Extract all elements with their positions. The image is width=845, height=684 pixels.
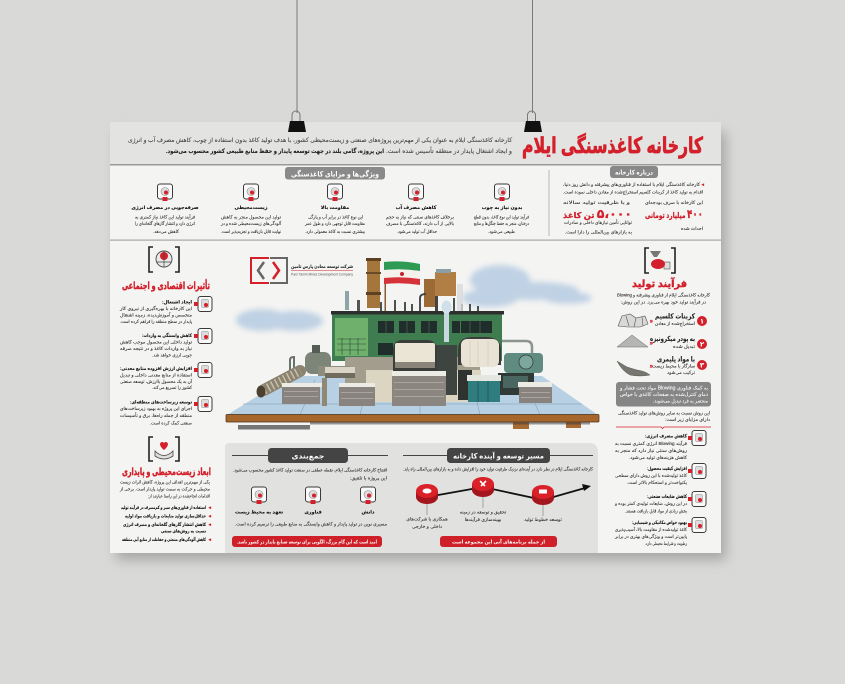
intro paragraph: و ایجاد اشتغال پایدار در منطقه تأسیس شده است. bbox=[386, 146, 512, 155]
machinery base bbox=[345, 345, 481, 402]
stat: capacity: به بازارهای بین‌المللی را دارا است. bbox=[565, 230, 632, 234]
callout: Blowing bbox=[616, 382, 711, 406]
about text: ◂ bbox=[701, 182, 704, 188]
red pill: امید است که این گام بزرگ، الگویی برای توسعه صنایع پایدار در کشور باشد. bbox=[237, 538, 377, 545]
milestone: production lines: توسعه خطوط تولید bbox=[524, 517, 562, 522]
pillar: environment commitment bbox=[235, 487, 283, 516]
feature: energy saving bbox=[131, 184, 199, 234]
feature: no wood bbox=[474, 184, 529, 234]
intro text: در فرآیند تولید خود بهره می‌برد. در این روش: bbox=[621, 300, 706, 304]
heading: features bbox=[285, 167, 385, 180]
feature: environment: نهایت قابل بازیافت و تجزیه‌پذیر است. bbox=[221, 229, 281, 234]
bullet list: ◂ bbox=[208, 537, 211, 543]
right machinery bbox=[498, 341, 543, 395]
item: jobs: ایجاد اشتغال: bbox=[162, 300, 192, 306]
intro paragraph bbox=[128, 135, 512, 155]
step 2: « bbox=[650, 341, 654, 347]
step 1: استخراج‌شده از معادن bbox=[655, 321, 695, 327]
benefit: properties: پایین‌تر است و ویژگی‌های بهتری در برابر bbox=[614, 533, 688, 539]
closing text: مسیری نوین در تولید پایدار و کاهش وابستگی به منابع طبیعی را ترسیم کرده است. bbox=[235, 520, 387, 528]
paragraph bbox=[119, 480, 211, 498]
poster sheet bbox=[110, 122, 721, 553]
paragraph: محیطی و حرکت به سمت تولید پایدار است. برخی از bbox=[119, 486, 210, 492]
step 3: ۳ bbox=[700, 362, 705, 370]
feature: high strength: بیشتری نسبت به کاغذ معمولی دارد. bbox=[305, 229, 365, 234]
heading: مسیر توسعه و آینده کارخانه bbox=[453, 450, 544, 460]
intro text: کارخانه کاغذسنگی ایلام از فناوری پیشرفته و Blowing bbox=[617, 292, 711, 298]
icon: hands and heart bbox=[149, 437, 179, 461]
stat: capacity: ۵،۰۰۰ تن کاغذ bbox=[563, 207, 632, 221]
feature: no wood: بدون نیاز به چوب bbox=[482, 205, 523, 211]
title: کارخانه کاغذسنگی ایلام bbox=[522, 132, 703, 158]
benefit: energy: کاهش مصرف انرژی: bbox=[645, 434, 687, 440]
benefit: waste: کاهش ضایعات صنعتی: bbox=[647, 494, 687, 500]
benefit: properties: کاغذ تولیدشده از مقاومت بالا، آسیب‌پذیری bbox=[615, 527, 688, 532]
heading: جمع‌بندی bbox=[292, 452, 324, 460]
heading: features: ویژگی‌ها و مزایای کاغذسنگی bbox=[291, 170, 379, 178]
intro paragraph: کارخانه کاغذسنگی ایلام به عنوان یکی از مهم‌ترین پروژه‌های صنعتی و زیست‌محیطی کشور، با هدف تولید کاغذ بدون استفاده از چوب، کاهش مصرف آب و انرژی bbox=[128, 135, 512, 144]
milestone: cooperation: همکاری با شرکت‌های bbox=[406, 516, 448, 522]
item: jobs: پایدار در سطح منطقه را فراهم کرده است. bbox=[120, 319, 193, 325]
bullet list: نسبت به روش‌های سنتی bbox=[161, 528, 206, 534]
bullet list: کاهش آلودگی‌های صنعتی و حفاظت از منابع آبی منطقه bbox=[122, 536, 206, 542]
item: jobs: متخصص و آموزش‌دیده، زمینه اشتغال bbox=[120, 312, 192, 318]
paper roll 1 bbox=[393, 340, 437, 372]
item: infrastructure: منطقه از جمله راه‌ها، برق و تأسیسات bbox=[120, 412, 192, 418]
feature: environment: زیست‌محیطی bbox=[234, 205, 268, 211]
milestone: cooperation bbox=[406, 484, 448, 529]
feature: water saving: حداقل آب تولید می‌شود. bbox=[397, 229, 437, 234]
step 3: سازگار با محیط زیست bbox=[652, 362, 695, 368]
panel: bottom center background bbox=[225, 443, 598, 553]
text block: این روش نسبت به سایر روش‌های تولید کاغذسنگی bbox=[618, 410, 710, 416]
feature: high strength: مقاومت بالا bbox=[321, 205, 349, 211]
feature: environment: تولید این محصول منجر به کاهش bbox=[221, 214, 282, 220]
about text bbox=[563, 181, 704, 205]
feature: energy saving: صرفه‌جویی در مصرف انرژی bbox=[131, 205, 199, 211]
red pill: از جمله برنامه‌های آتی این مجموعه است bbox=[452, 537, 545, 545]
benefit: energy: کاهش هزینه‌های تولید می‌شود. bbox=[629, 455, 688, 460]
panel: future path bbox=[403, 448, 594, 547]
text block bbox=[618, 410, 710, 422]
bullet list bbox=[121, 505, 211, 543]
roof equipment bbox=[345, 269, 478, 313]
heading bbox=[447, 448, 550, 463]
paper stacks bbox=[282, 371, 552, 406]
step 2: به پودر میکرونیزه bbox=[650, 335, 695, 343]
feature: environment: آلودگی‌های زیست‌محیطی شده و در bbox=[220, 220, 282, 226]
bullet list: ◂ bbox=[208, 522, 211, 528]
stat: budget bbox=[645, 207, 703, 231]
pillar: environment commitment: تعهد به محیط زیست bbox=[235, 510, 283, 516]
text: افتتاح کارخانه کاغذسنگی ایلام، نقطه عطفی در صنعت تولید کاغذ کشور محسوب می‌شود. bbox=[233, 466, 387, 472]
panel: features bbox=[110, 167, 721, 241]
milestone: cooperation: داخلی و خارجی bbox=[412, 524, 442, 529]
step 1: ۱ bbox=[700, 318, 704, 326]
feature: no wood: طبیعی می‌شود. bbox=[488, 229, 515, 234]
heading: فرآیند تولید bbox=[632, 277, 687, 290]
stat: budget: احداث شده bbox=[681, 226, 703, 231]
chimney bbox=[366, 258, 381, 308]
left machinery bbox=[290, 345, 355, 406]
step 1 bbox=[618, 312, 707, 327]
callout: Blowing: دمای کنترل‌شده به صفحات کاغذی با خواص bbox=[620, 392, 708, 398]
roadmap chart bbox=[406, 477, 591, 529]
item: infrastructure: صنعتی کمک کرده است. bbox=[150, 420, 192, 426]
step 2 bbox=[617, 335, 707, 349]
milestone: research: تحقیق و توسعه در زمینه bbox=[460, 510, 507, 514]
benefit: waste: بخش زیادی از مواد قابل بازیافت هستند. bbox=[625, 508, 687, 514]
heading: about bbox=[610, 166, 658, 178]
step 1: کربنات کلسیم bbox=[655, 312, 696, 320]
milestone: production lines bbox=[524, 485, 562, 522]
icon: globe bracket bbox=[149, 247, 179, 272]
feature: high strength: این نوع کاغذ در برابر آب و پارگی bbox=[308, 214, 363, 220]
feature: water saving bbox=[386, 184, 454, 234]
item: added value: استفاده از منابع معدنی داخلی و تبدیل bbox=[120, 372, 192, 378]
flag bbox=[384, 261, 420, 314]
paper roll 2 bbox=[458, 337, 501, 367]
step 2: تبدیل شده bbox=[673, 344, 696, 349]
paragraph: یکی از مهم‌ترین اهداف این پروژه، کاهش اثرات زیست bbox=[120, 480, 211, 486]
poster shadow bbox=[116, 132, 726, 560]
step 1: « bbox=[650, 319, 654, 325]
pillar: technology bbox=[304, 487, 322, 516]
heading: about: درباره کارخانه bbox=[615, 170, 654, 176]
feature: water saving: بالایی از آب دارند، کاغذسنگی با مصرف bbox=[386, 220, 454, 226]
feature: environment bbox=[220, 184, 282, 234]
benefit: quality bbox=[615, 464, 706, 485]
step 3 bbox=[617, 356, 707, 376]
item: imports: جویی ارزی خواهد شد. bbox=[152, 352, 192, 358]
hanging strings bbox=[297, 0, 532, 113]
header band bbox=[110, 122, 721, 166]
text: کارخانه کاغذسنگی ایلام در نظر دارد در آینده‌ای نزدیک ظرفیت تولید خود را افزایش داده و به بازارهای بین‌المللی راه یابد. bbox=[403, 466, 594, 472]
feature: water saving: برخلاف کاغذهای سنتی که نیاز به حجم bbox=[386, 214, 454, 220]
panel: economic and social impacts bbox=[119, 247, 212, 426]
stat: capacity bbox=[563, 207, 633, 234]
benefit: quality: کاغذ تولیدشده با این روش دارای سطحی bbox=[615, 473, 688, 478]
factory building bbox=[331, 300, 504, 361]
pillar: knowledge bbox=[360, 487, 376, 516]
benefit: quality: یکنواخت‌تر و استحکام بالاتر است. bbox=[627, 480, 688, 485]
bullet list: کاهش انتشار گازهای گلخانه‌ای و مصرف انرژی bbox=[123, 521, 206, 527]
panel: production process bbox=[614, 248, 711, 546]
text: این پروژه با تلفیق: bbox=[350, 476, 387, 480]
red pill bbox=[232, 536, 382, 547]
pipe coil bbox=[256, 371, 300, 398]
factory illustration bbox=[226, 258, 599, 430]
benefit: quality: افزایش کیفیت محصول: bbox=[647, 466, 687, 472]
company logo bbox=[251, 258, 353, 283]
about text: این کارخانه با صرف بودجه‌ای bbox=[645, 200, 703, 205]
heading bbox=[268, 448, 348, 463]
item: jobs bbox=[119, 296, 212, 325]
benefit: properties: رطوبت و شرایط محیطی دارد. bbox=[645, 541, 687, 546]
company logo: Pars Tamin Mines Development Company bbox=[291, 272, 353, 276]
intro text bbox=[617, 292, 711, 304]
item: added value: افزایش ارزش افزوده منابع معدنی: bbox=[120, 366, 192, 372]
benefit: energy bbox=[615, 430, 706, 460]
benefit: energy: روش‌های سنتی نیاز دارد که منجر به bbox=[615, 448, 687, 453]
feature: no wood: فرآیند تولید این نوع کاغذ، بدون قطع bbox=[474, 214, 529, 220]
stat: budget: ۴۰۰ میلیارد تومانی bbox=[645, 207, 703, 221]
feature: energy saving: فرآیند تولید این کاغذ نیاز کمتری به bbox=[135, 214, 195, 220]
milestone: research bbox=[460, 477, 507, 522]
text bbox=[233, 466, 387, 480]
step 3: ترکیب می‌شود bbox=[667, 370, 696, 375]
intro paragraph: این پروژه، گامی بلند در جهت توسعه پایدار و حفظ منابع طبیعی کشور محسوب می‌شود. bbox=[166, 147, 384, 155]
feature: energy saving: کاهش می‌دهد. bbox=[153, 229, 180, 234]
pillar: knowledge: دانش bbox=[362, 510, 375, 516]
feature: energy saving: انرژی دارد و انتشار گازهای گلخانه‌ای را bbox=[135, 220, 195, 226]
milestone: research: بهینه‌سازی فرآیندها bbox=[465, 517, 501, 522]
feature: high strength bbox=[304, 184, 365, 234]
stat: capacity: توانایی تأمین نیازهای داخلی و صادرات bbox=[564, 219, 633, 225]
heading: تأثیرات اقتصادی و اجتماعی bbox=[122, 279, 210, 292]
item: infrastructure: اجرای این پروژه به بهبود زیرساخت‌های bbox=[120, 406, 192, 411]
pillar: technology: فناوری bbox=[304, 510, 322, 516]
benefit: properties bbox=[614, 518, 706, 546]
item: infrastructure bbox=[120, 396, 212, 426]
benefit: waste bbox=[614, 492, 706, 514]
benefit: properties: بهبود خواص مکانیکی و شیمیایی: bbox=[632, 520, 687, 526]
step 3: با مواد پلیمری bbox=[657, 356, 695, 364]
item: imports: تولید داخلی این محصول موجب کاهش bbox=[120, 340, 193, 344]
item: imports: نیاز به واردات کاغذ و در نتیجه صرفه bbox=[120, 346, 192, 351]
company logo: شرکت توسعه معادن پارس تامین bbox=[291, 264, 353, 269]
icon: process bracket bbox=[645, 248, 675, 273]
item: added value: آن به یک محصول باارزش، توسعه صنعتی bbox=[120, 379, 193, 384]
feature: water saving: کاهش مصرف آب bbox=[396, 204, 437, 211]
panel: environment and sustainability bbox=[119, 437, 211, 543]
panel: conclusion bbox=[232, 448, 388, 547]
bullet list: حداقل‌سازی تولید ضایعات و بازیافت مواد اولیه bbox=[125, 514, 206, 518]
about text: اقدام به تولید کاغذ از کربنات کلسیم استخراج‌شده از معادن داخلی نموده است. bbox=[563, 190, 703, 196]
callout: Blowing: منحصر به فرد تبدیل می‌شوند. bbox=[653, 398, 708, 404]
heading: ابعاد زیست‌محیطی و پایداری bbox=[122, 467, 211, 478]
clouds bbox=[236, 265, 592, 331]
bullet list: ◂ bbox=[208, 505, 211, 511]
item: infrastructure: توسعه زیرساخت‌های منطقه‌ای: bbox=[130, 400, 192, 406]
bullet list: ◂ bbox=[208, 514, 211, 520]
benefit: energy: فرآیند Blowing انرژی کمتری نسبت به bbox=[615, 441, 687, 446]
benefit: waste: در این روش، ضایعات تولیدی کمتر بوده و bbox=[614, 501, 687, 506]
feature: high strength: مقاومت قابل توجهی دارد و طول عمر bbox=[304, 221, 365, 226]
paragraph: اقدامات انجام‌شده در این راستا عبارتند از: bbox=[148, 494, 210, 498]
item: imports: کاهش وابستگی به واردات: bbox=[142, 332, 192, 339]
about text: و با ظرفیت تولید سالانه bbox=[563, 200, 630, 205]
item: jobs: این کارخانه با بهره‌گیری از نیروی کار bbox=[119, 305, 192, 311]
item: added value bbox=[120, 362, 212, 390]
callout: Blowing: به کمک فناوری Blowing مواد تحت فشار و bbox=[619, 386, 708, 392]
binder clips bbox=[288, 111, 542, 132]
about text: کارخانه کاغذسنگی ایلام با استفاده از فناوری‌های پیشرفته و دانش روز دنیا، bbox=[563, 181, 701, 187]
step 2: ۲ bbox=[700, 342, 705, 348]
step 3: « bbox=[650, 364, 654, 370]
item: imports bbox=[120, 328, 212, 358]
red pill bbox=[440, 536, 557, 547]
item: added value: کشور را تسریع می‌کند. bbox=[152, 385, 193, 390]
bullet list: استفاده از فناوری‌های سبز و کم‌مصرف در فرآیند تولید bbox=[121, 505, 206, 510]
text block: دارای مزایای زیر است: bbox=[665, 417, 710, 422]
feature: no wood: درختان، منجر به حفظ جنگل‌ها و منابع bbox=[474, 220, 529, 226]
panel: about factory bbox=[549, 166, 704, 236]
platform bbox=[227, 376, 598, 415]
